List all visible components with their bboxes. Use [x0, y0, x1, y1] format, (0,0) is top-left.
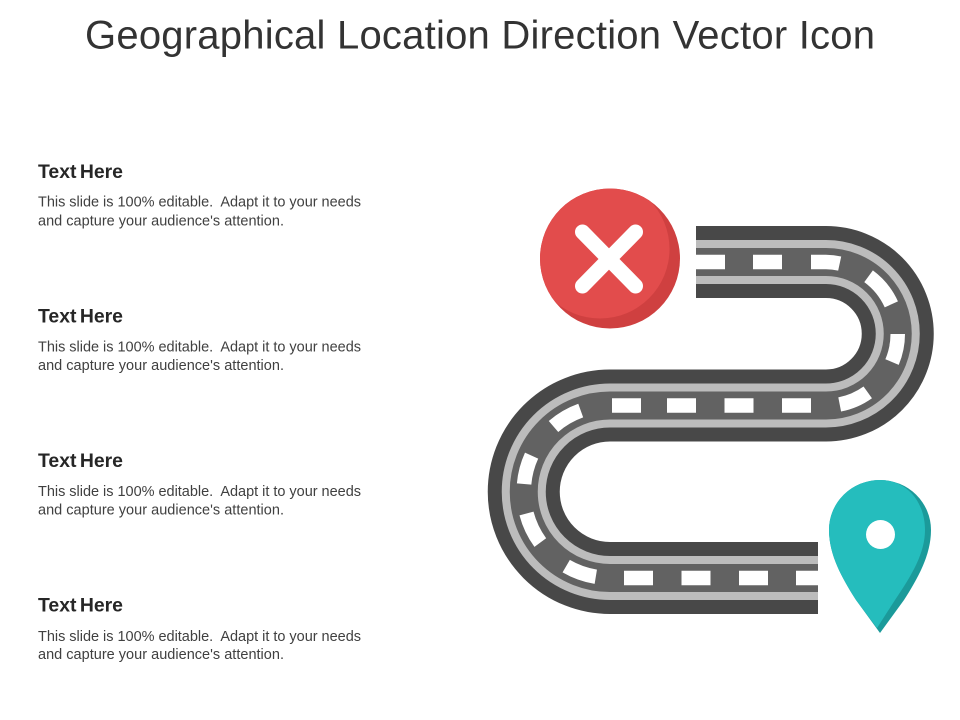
text block 2: and capture your audience's attention.: [38, 358, 284, 374]
text block 2: This slide is 100% editable. Adapt it to your needs: [38, 340, 361, 356]
winding road: [524, 262, 898, 578]
icon: red cross circle: [540, 188, 680, 328]
text block 1: Text Here: [38, 161, 123, 183]
text block 1: and capture your audience's attention.: [38, 214, 284, 230]
road lane dashes: [524, 262, 898, 578]
text block 2: Text Here: [38, 306, 123, 328]
text block 3: Text Here: [38, 450, 123, 472]
title: Geographical Location Direction Vector Icon: [85, 14, 875, 58]
text block 4: Text Here: [38, 594, 123, 616]
text block 3: This slide is 100% editable. Adapt it to your needs: [38, 484, 361, 500]
text block 3: [38, 450, 361, 518]
text block 3: and capture your audience's attention.: [38, 502, 284, 518]
text block 4: This slide is 100% editable. Adapt it to your needs: [38, 629, 361, 645]
icon: teal location pin: [829, 480, 931, 633]
text block 1: [38, 161, 361, 230]
text block 1: This slide is 100% editable. Adapt it to your needs: [38, 194, 361, 210]
text block 2: [38, 306, 361, 374]
text block 4: and capture your audience's attention.: [38, 647, 284, 663]
text block 4: [38, 594, 361, 663]
